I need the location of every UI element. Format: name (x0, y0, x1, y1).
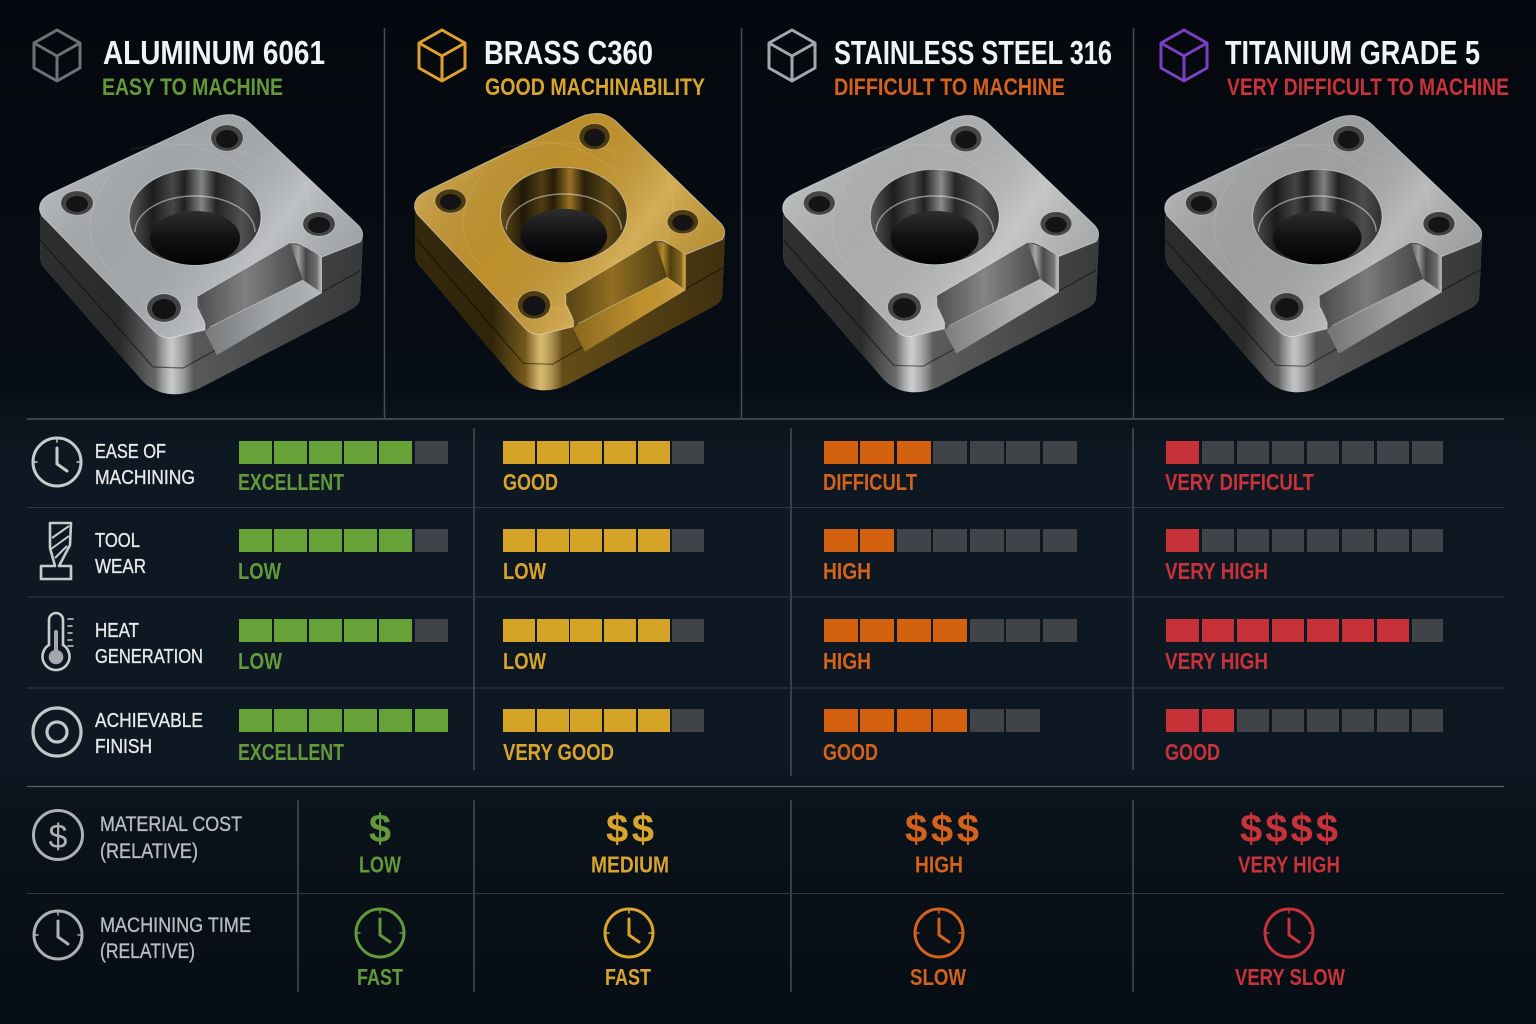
steel rating text: DIFFICULT (823, 469, 917, 495)
row: ease of machining (33, 438, 1443, 495)
steel cost: $$$ (905, 807, 979, 851)
icon: aluminum cube (34, 30, 80, 81)
brass rating bar (503, 619, 704, 642)
icon: grey clock (34, 911, 82, 959)
label: machining time (100, 914, 251, 963)
label: tool wear: WEAR (95, 556, 146, 578)
row: tool wear (41, 523, 1443, 584)
titanium rating bar (1166, 529, 1443, 552)
aluminum time: FAST (357, 964, 403, 990)
label: tool wear: TOOL (95, 530, 140, 552)
label: achievable finish (95, 710, 203, 758)
label: machining time: (RELATIVE) (100, 940, 195, 963)
steel time: SLOW (910, 964, 966, 990)
panel: titanium grade 5 header (1161, 30, 1509, 101)
aluminum rating bar (239, 619, 448, 642)
label: heat generation: HEAT (95, 620, 139, 642)
icon: thermometer (42, 613, 73, 670)
steel time (910, 909, 966, 990)
titanium cost: $$$$ (1240, 807, 1338, 851)
titanium rating text: VERY DIFFICULT (1165, 469, 1314, 495)
titanium rating text: VERY HIGH (1165, 648, 1268, 674)
panel: brass c360 header (419, 30, 705, 101)
steel rating text: GOOD (823, 739, 878, 765)
label: material cost: (RELATIVE) (100, 840, 198, 863)
aluminum rating bar (239, 709, 448, 732)
label: ease of machining: MACHINING (95, 467, 195, 489)
title: titanium: TITANIUM GRADE 5 (1225, 34, 1480, 71)
part image: aluminum (40, 114, 363, 394)
subtitle: stainless steel: DIFFICULT TO MACHINE (834, 74, 1065, 101)
steel rating text: HIGH (823, 648, 871, 674)
brass time: FAST (605, 964, 651, 990)
steel rating bar (824, 709, 1040, 732)
row: material cost (34, 807, 1340, 878)
aluminum rating text: LOW (238, 648, 282, 674)
subtitle: aluminum: EASY TO MACHINE (102, 74, 283, 101)
aluminum rating bar (239, 529, 448, 552)
brass cost: $$ (606, 807, 654, 851)
titanium rating bar (1166, 709, 1443, 732)
brass rating text: GOOD (503, 469, 558, 495)
brass rating text: LOW (503, 558, 546, 584)
label: material cost: MATERIAL COST (100, 813, 242, 836)
steel rating text: HIGH (823, 558, 871, 584)
label: machining time: MACHINING TIME (100, 914, 251, 937)
label: material cost (100, 813, 242, 863)
panel: aluminum 6061 header (34, 30, 325, 101)
icon: target finish (33, 708, 81, 756)
row: achievable finish (33, 708, 1443, 765)
aluminum cost (359, 807, 401, 878)
part image: brass (415, 113, 725, 390)
titanium rating bar (1166, 441, 1443, 464)
aluminum time (356, 909, 404, 990)
aluminum rating text: LOW (238, 558, 281, 584)
label: heat generation: GENERATION (95, 646, 203, 668)
steel rating bar (824, 529, 1077, 552)
brass rating text: VERY GOOD (503, 739, 614, 765)
titanium cost (1238, 807, 1340, 878)
label: tool wear (95, 530, 146, 578)
brass time (605, 909, 653, 990)
steel rating bar (824, 619, 1077, 642)
brass rating text: LOW (503, 648, 546, 674)
brass cost (591, 807, 669, 878)
part image: titanium (1165, 115, 1482, 392)
label: achievable finish: FINISH (95, 736, 152, 758)
steel cost: HIGH (915, 852, 963, 878)
steel cost (905, 807, 979, 878)
brass cost: MEDIUM (591, 852, 669, 878)
title: aluminum: ALUMINUM 6061 (103, 34, 325, 71)
icon: dollar circle: $ (49, 818, 68, 856)
aluminum rating text: EXCELLENT (238, 469, 344, 495)
panel: stainless steel 316 header (769, 30, 1112, 101)
brass rating bar (503, 709, 704, 732)
brass rating bar (503, 441, 704, 464)
aluminum cost: $ (369, 807, 391, 851)
brass rating bar (503, 529, 704, 552)
icon: end mill (41, 523, 71, 579)
title: stainless steel: STAINLESS STEEL 316 (834, 34, 1112, 71)
icon: steel cube (769, 30, 815, 81)
label: heat generation (95, 620, 203, 668)
aluminum rating bar (239, 441, 448, 464)
part image: stainless steel (783, 115, 1099, 392)
label: ease of machining: EASE OF (95, 441, 166, 463)
titanium rating bar (1166, 619, 1443, 642)
label: ease of machining (95, 441, 195, 489)
title: brass: BRASS C360 (484, 34, 653, 71)
subtitle: brass: GOOD MACHINABILITY (485, 74, 705, 101)
aluminum cost: LOW (359, 852, 401, 878)
label: achievable finish: ACHIEVABLE (95, 710, 203, 732)
row: heat generation (42, 613, 1443, 674)
titanium cost: VERY HIGH (1238, 852, 1340, 878)
titanium time (1235, 909, 1345, 990)
titanium rating text: VERY HIGH (1165, 558, 1268, 584)
steel rating bar (824, 441, 1077, 464)
titanium rating text: GOOD (1165, 739, 1220, 765)
row: machining time (34, 909, 1345, 990)
titanium time: VERY SLOW (1235, 964, 1345, 990)
icon: titanium cube (1161, 30, 1207, 81)
icon: dollar circle (34, 810, 82, 860)
aluminum rating text: EXCELLENT (238, 739, 344, 765)
icon: brass cube (419, 30, 465, 81)
icon: clock (33, 438, 81, 486)
